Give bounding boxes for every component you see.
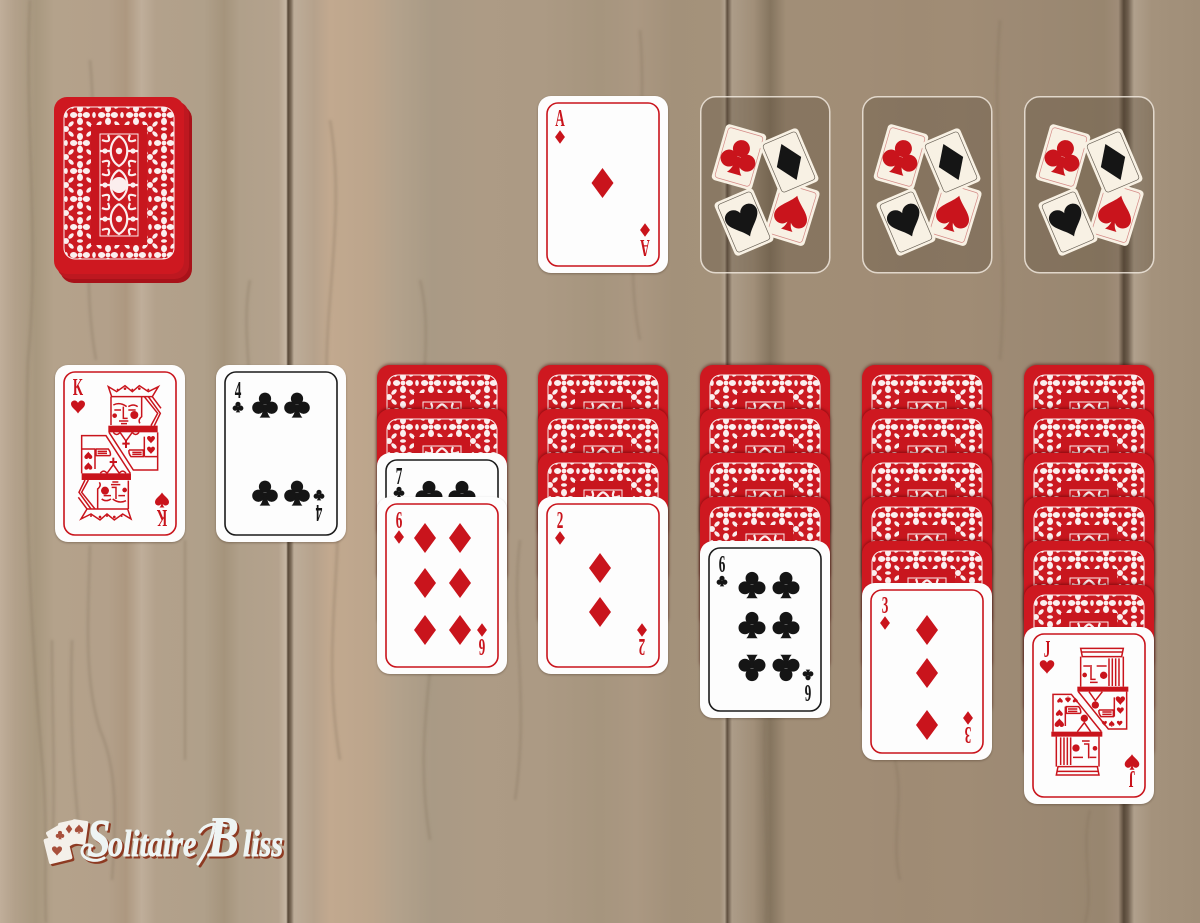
six of diamonds (377, 497, 507, 674)
logo wordmark (82, 806, 283, 869)
tableau column 3: face-down cards, seven of clubs, six of diamonds (377, 365, 507, 674)
jack of hearts (1024, 627, 1154, 804)
tableau column 7: face-down cards, jack of hearts (1024, 365, 1154, 804)
tableau column 2: four of clubs: 4 (315, 499, 322, 525)
tableau column 4: face-down cards, two of diamonds (538, 365, 668, 674)
six of clubs (700, 541, 830, 718)
jack of hearts: J (1044, 637, 1051, 663)
two of diamonds (538, 497, 668, 674)
tableau column 1: king of hearts: K (157, 504, 167, 530)
seven of clubs: 7 (396, 464, 403, 490)
brand name text: olitaire (108, 824, 196, 865)
tableau column 1: king of hearts: K (73, 375, 83, 401)
brand name text: liss (243, 824, 283, 865)
brand name text: S (87, 811, 110, 868)
foundation slot 4: empty placeholder (1025, 97, 1154, 273)
icon: fan of cards (43, 819, 89, 865)
two of diamonds: 2 (557, 508, 563, 534)
six of clubs: 6 (804, 679, 811, 705)
three of diamonds (862, 583, 992, 760)
three of diamonds: 3 (964, 721, 971, 747)
brand name text: B (207, 806, 239, 869)
tableau column 2: four of clubs: 4 (235, 378, 242, 404)
foundation slot 3: empty placeholder (863, 97, 992, 273)
foundation: ace of diamonds: A (555, 106, 565, 132)
foundation slot 2: empty placeholder (701, 97, 830, 273)
foundation: ace of diamonds (538, 96, 668, 273)
tableau column 5: face-down cards, six of clubs (700, 365, 830, 718)
flourishes on the S and B (82, 824, 226, 864)
jack of hearts: J (1128, 765, 1135, 791)
tableau column 6: face-down cards, three of diamonds (862, 365, 992, 760)
two of diamonds: 2 (639, 633, 645, 659)
six of diamonds: 6 (478, 633, 485, 659)
logo: Solitaire Bliss (43, 806, 283, 869)
six of diamonds: 6 (396, 508, 403, 534)
three of diamonds: 3 (882, 593, 889, 619)
six of clubs: 6 (719, 552, 726, 578)
tableau column 2: four of clubs (216, 365, 346, 542)
stock pile: face-down deck (54, 97, 192, 283)
foundation: ace of diamonds: A (640, 234, 650, 260)
tableau column 1: king of hearts (55, 365, 185, 542)
seven of clubs (377, 453, 507, 630)
